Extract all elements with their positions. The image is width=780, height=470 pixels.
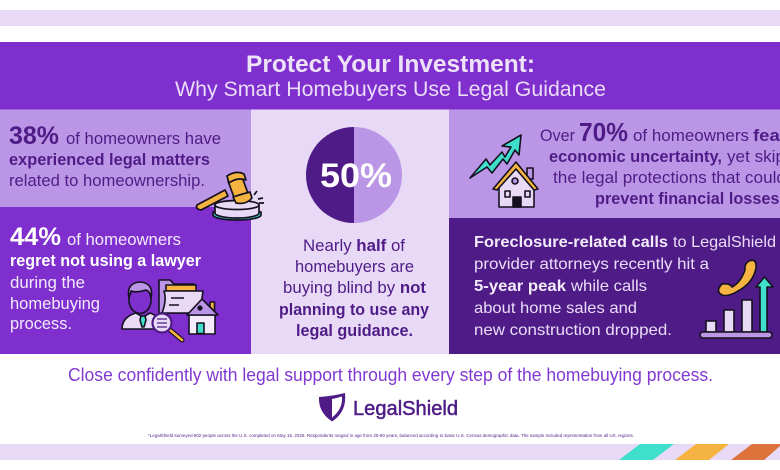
panel: 70% economic uncertainty: the legal protections that could xyxy=(553,169,780,187)
panel: 70% economic uncertainty: of homeowners xyxy=(633,127,749,145)
panel: 70% economic uncertainty xyxy=(449,110,780,218)
panel: 44% regret: process. xyxy=(10,315,72,333)
logo: LegalShield: LegalShield xyxy=(353,398,458,420)
panel: 44% regret: 44% xyxy=(10,223,61,251)
center text: Nearly half of xyxy=(303,237,405,255)
center text: legal guidance. xyxy=(296,322,413,340)
panel: 44% regret xyxy=(0,207,251,354)
title: Protect Your Investment: xyxy=(246,51,535,78)
panel: 38% legal matters: 38% xyxy=(9,122,59,150)
panel: foreclosure calls: to LegalShield xyxy=(673,234,776,251)
panel: foreclosure calls: while calls xyxy=(570,278,647,295)
bottom band with stripes xyxy=(0,444,780,460)
panel: 38% legal matters: of homeowners have xyxy=(66,130,221,148)
panel: foreclosure calls: provider attorneys recently hit a xyxy=(474,256,709,273)
panel: 44% regret: homebuying xyxy=(10,295,100,313)
panel: foreclosure calls: Foreclosure-related calls xyxy=(474,234,668,251)
panel: foreclosure calls: 5-year peak xyxy=(474,278,566,295)
panel: 44% regret: regret not using a lawyer xyxy=(10,252,202,270)
panel: 38% legal matters xyxy=(0,110,251,207)
icon: shield xyxy=(319,393,345,422)
panel: 70% economic uncertainty: Over xyxy=(540,127,575,145)
header banner xyxy=(0,42,780,110)
center text: buying blind by not xyxy=(283,279,427,297)
footnote: *LegalShield surveyed 802 people across the U.S. completed on May 15, 2025. Respondents ranged in age from 25-80 years, balanced according to basic U.S. Census demographic data. The sample included representation from all US. regions. xyxy=(148,433,634,438)
panel: 38% legal matters: related to homeownership. xyxy=(9,172,205,190)
top decorative band xyxy=(0,10,780,26)
panel: 70% economic uncertainty: economic uncertainty, xyxy=(549,148,722,166)
panel: 38% legal matters: experienced legal matters xyxy=(9,151,210,169)
center text: homebuyers are xyxy=(295,258,414,276)
panel: 70% economic uncertainty: 70% xyxy=(579,117,628,147)
pie chart xyxy=(306,127,402,223)
panel: center 50% xyxy=(251,110,449,354)
icon: gavel xyxy=(196,172,264,220)
panel: 44% regret: of homeowners xyxy=(67,231,181,249)
panel: foreclosure calls: new construction dropped. xyxy=(474,322,672,339)
center text xyxy=(279,237,430,340)
icon: lawyer, folder, house xyxy=(122,280,218,340)
center text: planning to use any xyxy=(279,301,430,319)
panel: 44% regret: during the xyxy=(10,274,85,292)
panel: foreclosure calls: about home sales and xyxy=(474,300,637,317)
icon: rising arrow and house xyxy=(470,135,538,207)
icon: phone and rising bars xyxy=(700,260,773,338)
pie chart: 50% xyxy=(320,157,392,195)
closing tagline: Close confidently with legal support through every step of the homebuying process. xyxy=(68,365,713,385)
subtitle: Why Smart Homebuyers Use Legal Guidance xyxy=(175,78,606,101)
logo: LegalShield xyxy=(319,393,458,422)
panel: foreclosure calls xyxy=(449,218,780,354)
